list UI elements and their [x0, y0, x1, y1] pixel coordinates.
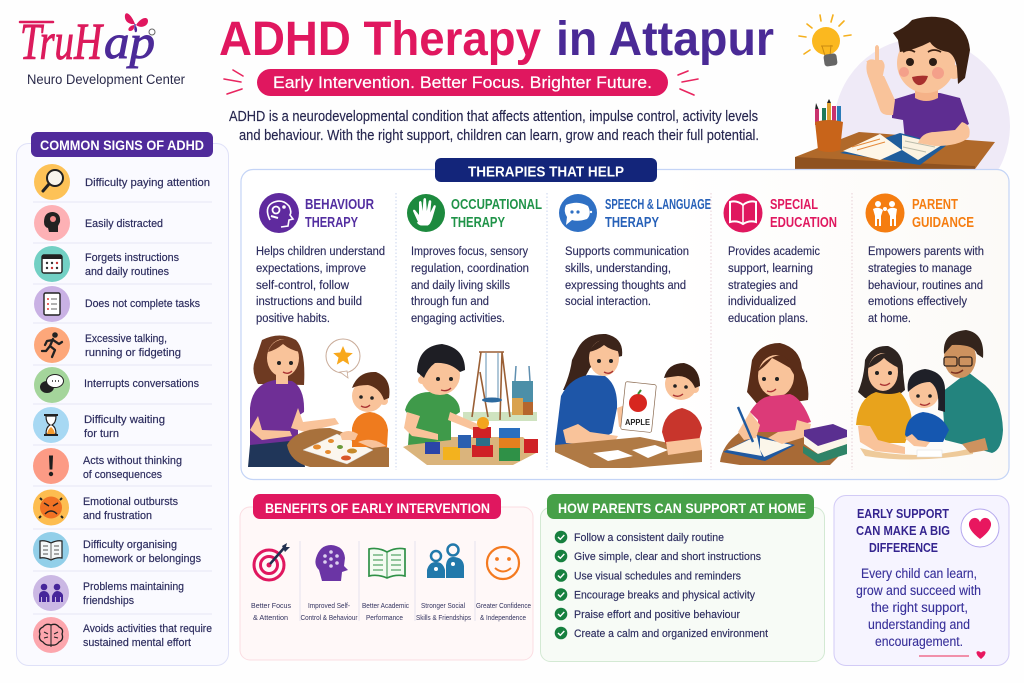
therapy: parent guidance [856, 194, 1003, 460]
panel: how parents can support at home [540, 494, 824, 662]
flash card [621, 382, 656, 433]
heading [435, 158, 657, 182]
sign text: of consequences [83, 469, 162, 481]
book [840, 133, 947, 165]
benefit: academic: Better Academic [362, 601, 409, 610]
description: Improves focus, sensory [411, 244, 529, 258]
icon: butterfly [125, 13, 148, 32]
benefit: self-control [300, 545, 358, 622]
description [411, 244, 529, 325]
icon: brain [33, 617, 69, 653]
icon: heart [961, 509, 999, 547]
checklist item: Encourage breaks and physical activity [574, 590, 755, 602]
icon: hand [407, 194, 445, 232]
description [868, 244, 984, 325]
intro text: and behaviour. With the right support, children can learn, grow and reach their full potential. [239, 128, 759, 144]
book stack [803, 424, 847, 463]
tagline pill [257, 69, 668, 96]
intro text [229, 109, 759, 144]
heading: THERAPY [605, 215, 659, 231]
callout text: the right support, [871, 600, 968, 615]
description [256, 244, 385, 325]
heading: GUIDANCE [912, 215, 974, 231]
sign text [83, 496, 178, 522]
description: education plans. [728, 311, 808, 325]
checklist item: Praise effort and positive behaviour [574, 609, 740, 621]
head [897, 33, 955, 93]
description: social interaction. [565, 294, 651, 308]
therapy: occupational [403, 194, 542, 465]
sign text: Difficulty waiting [84, 414, 165, 426]
benefit: social: Stronger Social [421, 601, 465, 610]
therapy: special education [720, 194, 847, 465]
icon: distracted head [34, 205, 70, 241]
sign text: and frustration [83, 510, 152, 522]
icon: light bulb [799, 15, 851, 67]
description: through fun and [411, 294, 489, 308]
description [728, 244, 820, 325]
panel: common signs of ADHD [16, 132, 228, 666]
heading [305, 197, 374, 231]
description: Helps children understand [256, 244, 385, 258]
callout heading [856, 506, 950, 555]
callout: early support [834, 496, 1009, 666]
description: expectations, improve [256, 261, 366, 275]
heading: SPECIAL [770, 197, 818, 213]
heading [451, 197, 542, 231]
panel: benefits of early intervention [240, 494, 533, 660]
icon: open book [724, 194, 762, 232]
therapy: behaviour [248, 193, 389, 467]
logo: TruHap: ap [104, 16, 155, 69]
underline with small heart [919, 651, 986, 659]
benefit: social [416, 544, 471, 622]
icon: smiley [487, 547, 519, 579]
heading [912, 197, 974, 231]
heading [253, 494, 501, 519]
icon: target [254, 543, 290, 580]
description [565, 244, 689, 308]
callout text: grow and succeed with [856, 583, 981, 598]
icon: magnifier [34, 164, 70, 200]
sign text [83, 539, 201, 565]
description: Supports communication [565, 244, 689, 258]
sign text [85, 252, 179, 278]
icon: exclamation [33, 448, 69, 484]
callout text: encouragement. [875, 634, 963, 649]
heading: SPEECH & LANGUAGE [605, 197, 711, 213]
icon: book [369, 548, 405, 578]
icon: speech bubbles [34, 367, 70, 403]
benefit: confidence: & Independence [480, 613, 526, 622]
benefit: self-control: Control & Behaviour [300, 613, 358, 622]
illustration: boy with blocks and swing [403, 344, 538, 465]
sign text: Difficulty organising [83, 539, 177, 551]
icon: hourglass [33, 407, 69, 443]
icon: head with gears [259, 193, 299, 233]
callout heading: CAN MAKE A BIG [856, 523, 950, 538]
illustration: parents with child [856, 330, 1003, 460]
sign text: Difficulty paying attention [85, 177, 210, 189]
callout text: Every child can learn, [861, 566, 977, 581]
description: Provides academic [728, 244, 820, 258]
panel: therapies that help [241, 158, 1009, 480]
resting arm [918, 122, 970, 146]
sign text: and daily routines [85, 266, 169, 278]
benefit: focus [251, 543, 291, 622]
description: behaviour, routines and [868, 278, 983, 292]
description: self-control, follow [256, 278, 349, 292]
sign text: Does not complete tasks [85, 298, 200, 310]
sign text [85, 333, 181, 359]
description: expressing thoughts and [565, 278, 686, 292]
callout text [856, 566, 981, 649]
benefit: focus: Better Focus [251, 601, 291, 610]
callout text: understanding and [868, 617, 970, 632]
logo: TruHap: TruH [20, 14, 104, 71]
illustration: girl writing with books [720, 343, 847, 465]
icon: speech bubble [559, 194, 597, 232]
benefit: confidence [476, 547, 531, 622]
heading: COMMON SIGNS OF ADHD [40, 137, 204, 153]
description: strategies to manage [868, 261, 972, 275]
neck [915, 88, 938, 101]
callout heading: EARLY SUPPORT [857, 506, 949, 521]
sign text: Problems maintaining [83, 581, 184, 593]
speech bubble with star [326, 339, 360, 378]
description: engaging activities. [411, 311, 505, 325]
sign text: Easily distracted [85, 218, 163, 230]
benefit: focus: & Attention [253, 613, 288, 622]
icon: family [866, 194, 904, 232]
heading: HOW PARENTS CAN SUPPORT AT HOME [558, 500, 806, 516]
description: skills, understanding, [565, 261, 671, 275]
icon: running person [34, 327, 70, 363]
hero illustration: boy at desk [795, 15, 1010, 214]
icon: angry face [33, 490, 69, 526]
description: positive habits. [256, 311, 330, 325]
description: Empowers parents with [868, 244, 984, 258]
description: instructions and build [256, 294, 362, 308]
sign text: Excessive talking, [85, 333, 167, 345]
benefit: self-control: Improved Self- [308, 601, 350, 610]
heading: BEHAVIOUR [305, 197, 374, 213]
sign text: Acts without thinking [83, 455, 182, 467]
sign text: Avoids activities that require [83, 623, 212, 635]
checklist item: Use visual schedules and reminders [574, 570, 741, 582]
heading: OCCUPATIONAL [451, 197, 542, 213]
heading [547, 494, 814, 519]
heading [31, 132, 213, 157]
logo subtitle: Neuro Development Center [27, 72, 185, 87]
icon: head with brain [315, 545, 348, 581]
description: support, learning [728, 261, 813, 275]
sign text: for turn [84, 428, 119, 440]
checklist item: Follow a consistent daily routine [574, 532, 724, 544]
heading [770, 197, 837, 231]
sign text: Emotional outbursts [83, 496, 178, 508]
table [795, 132, 995, 169]
sign text [84, 414, 165, 440]
benefit: confidence: Greater Confidence [476, 601, 531, 610]
heading: EDUCATION [770, 215, 837, 231]
heading: THERAPY [305, 215, 358, 231]
checklist item: Create a calm and organized environment [574, 628, 769, 640]
icon: two friends [33, 575, 69, 611]
shirt [892, 93, 969, 140]
checklist item: Give simple, clear and short instructions [574, 551, 761, 563]
raised arm [868, 76, 895, 115]
description: regulation, coordination [411, 261, 529, 275]
sign text: Interrupts conversations [84, 378, 199, 390]
description: and daily living skills [411, 278, 510, 292]
intro text: ADHD is a neurodevelopmental condition that affects attention, impulse control, activity levels [229, 109, 758, 125]
sign text: Forgets instructions [85, 252, 179, 264]
benefit: academic: Performance [366, 613, 403, 622]
title [219, 13, 774, 66]
icon: two people [427, 544, 464, 578]
flash card: APPLE [625, 418, 651, 427]
heading: PARENT [912, 197, 958, 213]
callout heading: DIFFERENCE [869, 540, 938, 555]
icon: checklist [34, 286, 70, 322]
burst strokes left [224, 70, 243, 94]
benefit: academic [362, 548, 409, 622]
tagline pill: Early Intervention. Better Focus. Brighter Future. [273, 73, 652, 92]
title: ADHD Therapy [219, 13, 541, 66]
illustration: therapist with apple card and boy [555, 334, 702, 468]
heading: BENEFITS OF EARLY INTERVENTION [265, 500, 490, 516]
description: individualized [728, 294, 796, 308]
illustration: therapist and boy with board [248, 336, 389, 467]
sign text: homework or belongings [83, 553, 201, 565]
heading [605, 197, 711, 231]
sign text [83, 581, 184, 607]
pencil cup [815, 99, 843, 152]
sign text: running or fidgeting [85, 347, 181, 359]
sign text [83, 623, 212, 649]
description: strategies and [728, 278, 798, 292]
icon: open book [33, 532, 69, 568]
sign text [83, 455, 182, 481]
benefit: social: Skills & Friendships [416, 613, 471, 622]
heading: THERAPIES THAT HELP [468, 164, 624, 180]
heading: THERAPY [451, 215, 505, 231]
description: at home. [868, 311, 911, 325]
sign text: sustained mental effort [83, 637, 192, 649]
description: emotions effectively [868, 294, 968, 308]
icon: calendar [34, 246, 70, 282]
burst strokes right [678, 71, 698, 95]
sign text: friendships [83, 595, 134, 607]
therapy: speech and language [555, 194, 711, 468]
title: in Attapur [556, 13, 774, 66]
